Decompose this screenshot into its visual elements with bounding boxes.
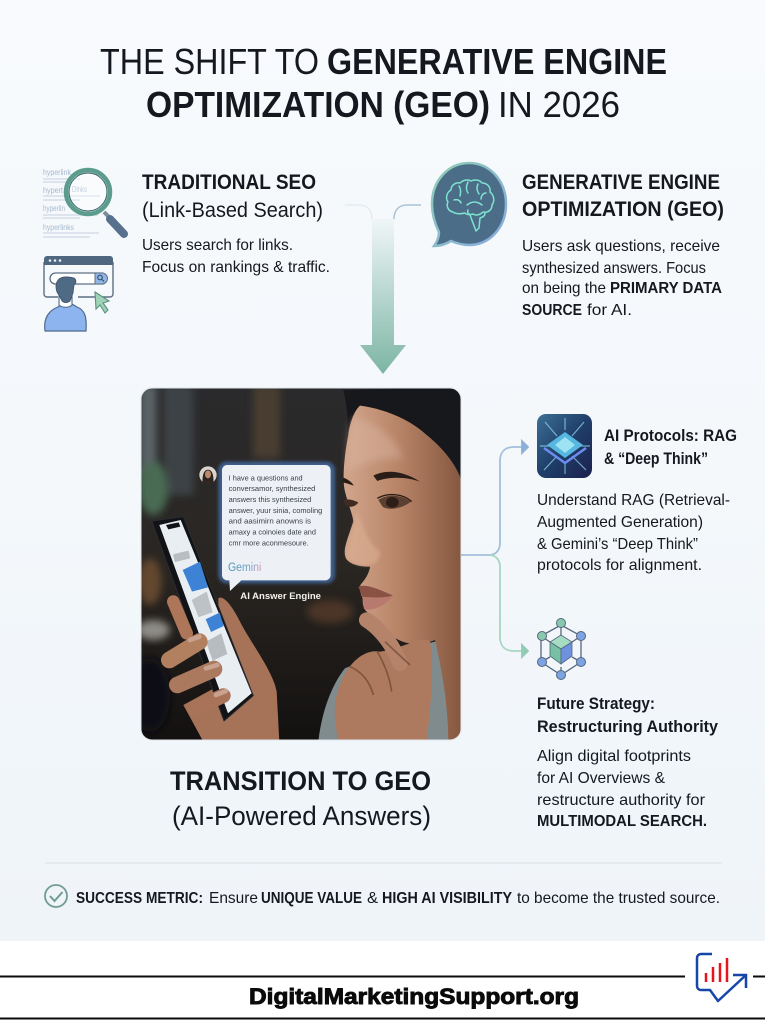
text block: generative engine optimization: synthesized answers. Focus: [522, 260, 706, 277]
heading: transition to GEO: (AI-Powered Answers): [172, 801, 431, 831]
text block: AI protocols: Augmented Generation): [537, 514, 703, 531]
shirt: [318, 642, 453, 742]
icon: AI chip: [537, 414, 592, 478]
photo: woman reading AI answer on phone: [130, 385, 465, 742]
heading: transition to GEO: [170, 766, 431, 831]
palm and thumb behind phone: [183, 598, 279, 742]
answer bubble: Gemini: [228, 560, 261, 574]
answer bubble: amaxy a coinoies date and: [229, 529, 316, 537]
thinking hand: [335, 620, 432, 742]
text block: traditional SEO: Users search for links.: [142, 237, 293, 254]
text block: generative engine optimization: Users ask questions, receive: [522, 238, 720, 255]
title: THE SHIFT TO: [100, 41, 319, 82]
icon: success check: [45, 885, 67, 907]
icon: magnifier over hyperlinks: hypert: [43, 186, 64, 195]
arrow: branch to future strategy: [489, 555, 528, 657]
text block: future strategy: [537, 694, 719, 830]
success metric: SUCCESS METRIC:: [76, 890, 203, 907]
text block: AI protocols: Understand RAG (Retrieval-: [537, 492, 730, 509]
label: AI Answer Engine: AI Answer Engine: [240, 591, 321, 601]
answer bubble: answer, yuur sinia, comoling: [229, 507, 322, 515]
holding fingers: [169, 602, 226, 708]
text block: AI protocols: & “Deep Think”: [604, 449, 708, 468]
answer bubble: conversamor, synthesized: [229, 485, 315, 493]
text block: AI protocols: protocols for alignment.: [537, 557, 702, 574]
title: OPTIMIZATION (GEO): [146, 84, 490, 125]
answer bubble: and aasimirn anowns is: [229, 518, 311, 526]
answer bubble: cmr more aconmesoure.: [229, 539, 309, 547]
success metric: [76, 890, 720, 907]
text block: generative engine optimization: GENERATIVE ENGINE: [522, 171, 720, 194]
arrow: converging down arrow: [345, 205, 421, 374]
phone: [152, 517, 253, 721]
icon: magnifier over hyperlinks: [43, 168, 124, 237]
arrow: branch to AI protocols: [461, 441, 528, 555]
icon: footer logo: [697, 954, 746, 1001]
heading: transition to GEO: TRANSITION TO GEO: [170, 766, 431, 796]
text block: future strategy: MULTIMODAL SEARCH.: [537, 813, 707, 830]
text block: traditional SEO: Focus on rankings & traffic.: [142, 259, 330, 276]
text block: future strategy: restructure authority for: [537, 792, 706, 809]
text block: generative engine optimization: [522, 171, 724, 319]
footer site name: DigitalMarketingSupport.org: [249, 984, 579, 1009]
icon: network cube: [538, 618, 586, 680]
hair: [344, 388, 460, 475]
text block: generative engine optimization: OPTIMIZATION (GEO): [522, 198, 724, 221]
answer bubble: [222, 465, 331, 591]
text block: AI protocols: & Gemini’s “Deep Think”: [537, 536, 698, 553]
success metric: to become the trusted source.: [517, 890, 720, 907]
title: IN 2026: [498, 84, 620, 125]
face: [343, 406, 462, 742]
text block: future strategy: Future Strategy:: [537, 694, 655, 713]
avatar: [199, 466, 217, 484]
photo frame: [141, 388, 461, 740]
icon: magnifier over hyperlinks: hyperlink: [43, 168, 72, 177]
text block: future strategy: Restructuring Authority: [537, 717, 719, 736]
text block: generative engine optimization: SOURCE: [522, 302, 582, 319]
icon: magnifier over hyperlinks: hyperlinks: [43, 223, 74, 232]
answer bubble: I have a questions and: [229, 474, 303, 482]
success metric: Ensure: [209, 890, 258, 907]
text block: traditional SEO: TRADITIONAL SEO: [142, 171, 316, 194]
success metric: UNIQUE VALUE: [261, 890, 362, 907]
answer bubble: answers this synthesized: [229, 496, 311, 504]
glow behind answer bubble: [218, 462, 335, 583]
text block: generative engine optimization: PRIMARY DATA: [610, 280, 722, 297]
text block: AI protocols: [537, 426, 737, 574]
photo background blurs: [130, 385, 353, 732]
success metric: HIGH AI VISIBILITY: [382, 890, 512, 907]
footer band: [0, 941, 765, 1024]
text block: future strategy: for AI Overviews &: [537, 770, 665, 787]
text block: future strategy: Align digital footprints: [537, 748, 691, 765]
icon: magnifier over hyperlinks: hyperlin: [43, 204, 65, 213]
text block: traditional SEO: (Link-Based Search): [142, 199, 323, 222]
text block: generative engine optimization: for AI.: [587, 302, 632, 319]
text block: AI protocols: AI Protocols: RAG: [604, 426, 737, 445]
text block: generative engine optimization: on being the: [522, 280, 606, 297]
icon: user at browser search: [44, 256, 113, 331]
success metric: &: [367, 890, 378, 907]
title: GENERATIVE ENGINE: [327, 41, 667, 82]
icon: brain chat bubble: [432, 163, 506, 246]
text block: traditional SEO: [142, 171, 330, 276]
title: [100, 41, 667, 125]
icon: magnifier over hyperlinks: Dlnks: [72, 185, 87, 194]
